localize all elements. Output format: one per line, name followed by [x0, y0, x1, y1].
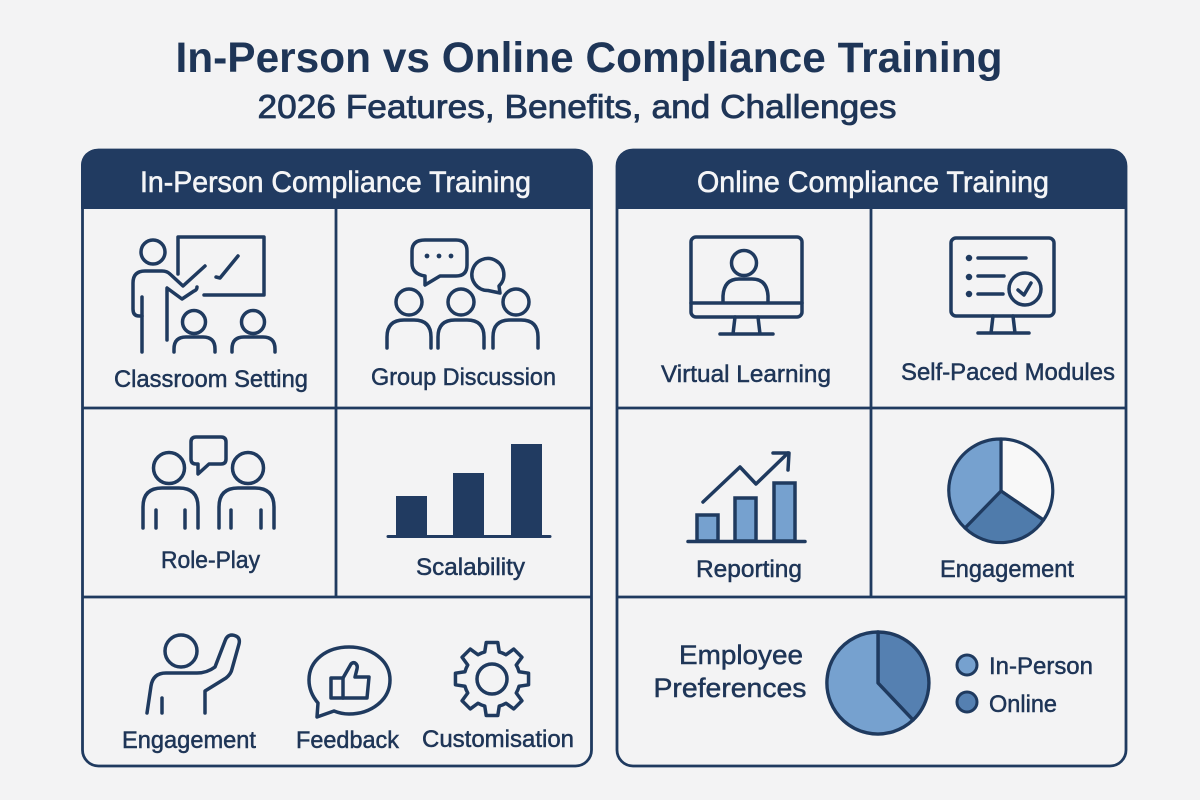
- icon: thumbs up in speech bubble: [309, 647, 390, 717]
- role-play cell: [143, 437, 274, 574]
- label: customisation: Customisation: [422, 726, 574, 753]
- label: group discussion: Group Discussion: [371, 364, 556, 391]
- feedback cell: [296, 647, 400, 754]
- label: employee preferences: Preferences: [654, 673, 806, 703]
- panel: online compliance training: [616, 149, 1127, 766]
- classroom setting cell: [114, 237, 308, 393]
- customisation cell: [422, 642, 574, 753]
- icon: rising bar chart: [688, 453, 805, 542]
- panel header: [81, 149, 592, 209]
- label: virtual learning: Virtual Learning: [661, 361, 831, 388]
- label: feedback: Feedback: [296, 727, 400, 754]
- legend: in-person: In-Person: [989, 653, 1093, 680]
- legend: online: Online: [989, 691, 1057, 718]
- icon: raised hand person: [147, 635, 239, 713]
- panel: in-person compliance training: [81, 149, 592, 766]
- label: employee preferences: [654, 640, 806, 703]
- icon: monitor with checklist: [951, 238, 1054, 333]
- label: scalability: Scalability: [416, 554, 525, 581]
- icon: gear: [455, 642, 529, 716]
- label: role-play: Role-Play: [161, 547, 260, 574]
- legend: [957, 653, 1093, 718]
- label: engagement: Engagement: [122, 727, 256, 754]
- panel header: Online Compliance Training: [697, 166, 1049, 199]
- virtual learning cell: [661, 237, 831, 388]
- label: reporting: Reporting: [696, 556, 802, 583]
- icon: monitor with presenter: [691, 237, 802, 334]
- panel header: [616, 149, 1127, 209]
- panel frame: [82, 150, 592, 766]
- label: self-paced modules: Self-Paced Modules: [901, 359, 1115, 386]
- panel header: In-Person Compliance Training: [140, 166, 531, 199]
- icon: group with speech bubbles: [387, 240, 538, 348]
- icon: three-part pie chart: [949, 439, 1053, 543]
- panel frame: [617, 150, 1126, 766]
- title: In-Person vs Online Compliance Training: [176, 34, 1002, 82]
- engagement cell: [122, 635, 256, 754]
- label: engagement: Engagement: [940, 556, 1074, 583]
- pie chart: preferences: [827, 632, 929, 734]
- label: employee preferences: Employee: [679, 640, 803, 670]
- group discussion cell: [371, 240, 556, 391]
- icon: two people talking: [143, 437, 274, 528]
- scalability cell: [388, 444, 550, 581]
- self-paced modules cell: [901, 238, 1115, 386]
- engagement cell: [940, 439, 1074, 583]
- icon: bar chart: [388, 444, 550, 536]
- icon: teacher at whiteboard: [133, 237, 275, 352]
- label: classroom setting: Classroom Setting: [114, 366, 308, 393]
- employee preferences cell: [654, 632, 1093, 734]
- reporting cell: [688, 453, 805, 583]
- subtitle: 2026 Features, Benefits, and Challenges: [258, 88, 896, 125]
